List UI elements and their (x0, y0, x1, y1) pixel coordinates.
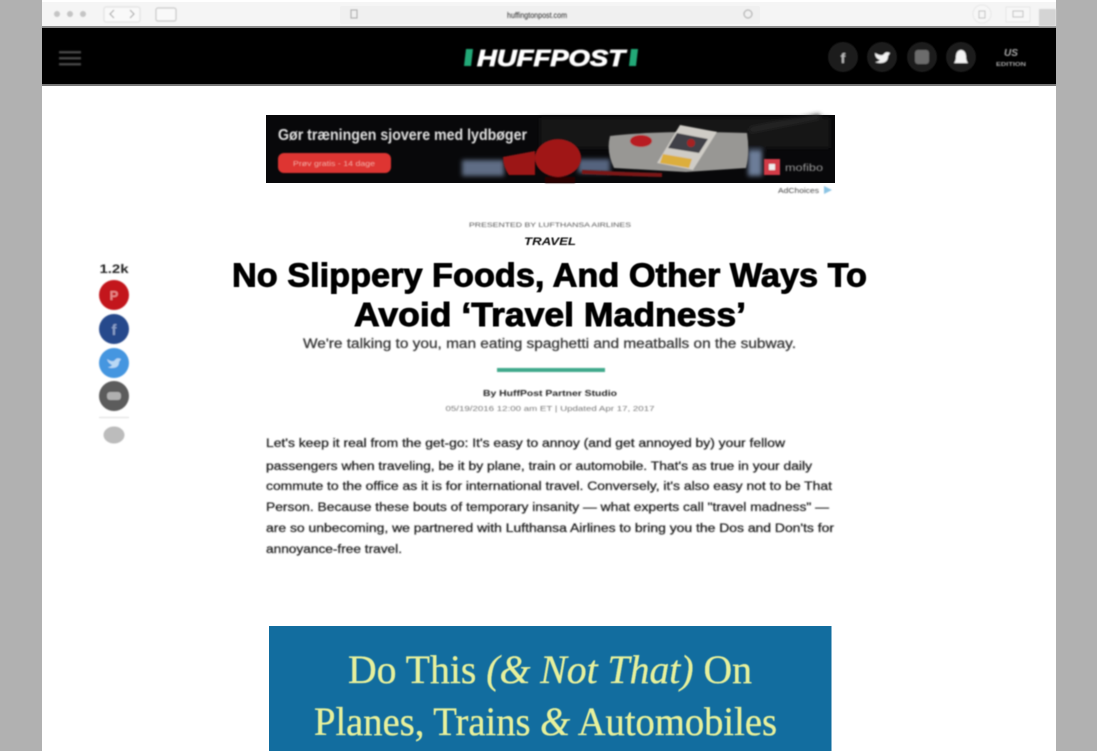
intro paragraph: Person. Because these bouts of temporary insanity — what experts call "travel madness" — (266, 502, 830, 514)
panel title: Planes, Trains & Automobiles (314, 699, 777, 744)
panel title: Do This (& Not That) On (348, 647, 752, 692)
site header bar (42, 28, 1056, 86)
ad logo: mofibo (785, 163, 824, 174)
edition selector: US (1004, 48, 1018, 59)
date line: 05/19/2016 12:00 am ET | Updated Apr 17, 2017 (446, 404, 654, 413)
left grey margin (0, 0, 42, 751)
window controls (54, 11, 86, 17)
ad logo (764, 159, 824, 175)
infographic preview panel (269, 626, 832, 751)
edition selector: EDITION (996, 62, 1026, 68)
browser toolbar (42, 2, 1056, 28)
intro paragraph: annoyance-free travel. (266, 544, 402, 556)
intro paragraph: commute to the office as it is for international travel. Conversely, it's also easy not to be That (266, 481, 833, 493)
share buttons (99, 280, 129, 444)
green divider (497, 368, 605, 372)
intro paragraph: Let's keep it real from the get-go: It's easy to annoy (and get annoyed by) your fellow (266, 438, 786, 450)
facebook button (99, 314, 129, 344)
advertisement banner (266, 115, 835, 183)
hamburger menu icon (59, 51, 81, 66)
intro paragraph: passengers when traveling, be it by plane, train or automobile. That's as true in your daily (266, 461, 812, 473)
facebook button: f (112, 322, 118, 339)
headline: Avoid ‘Travel Madness’ (354, 296, 746, 333)
ad headline: Gør træningen sjovere med lydbøger (278, 127, 527, 144)
ad image: phone (657, 125, 717, 170)
ad image: gym bag (609, 132, 748, 172)
social icons (828, 42, 976, 72)
share count: 1.2k (100, 262, 129, 276)
intro paragraph (266, 438, 834, 556)
ad image: red headphones (503, 139, 662, 183)
ad button: Prøv gratis - 14 dage (293, 159, 375, 168)
toolbar icons (351, 5, 1056, 26)
right grey margin (1056, 0, 1097, 751)
ad button (278, 153, 391, 173)
ad backdrop (462, 116, 830, 176)
section label: TRAVEL (524, 236, 576, 248)
adchoices label (778, 186, 832, 195)
huffpost logo: HUFFPOST (477, 45, 627, 71)
edition selector (996, 48, 1026, 68)
address bar (340, 6, 760, 24)
pinterest button: P (110, 288, 119, 303)
headline (232, 256, 867, 333)
intro paragraph: are so unbecoming, we partnered with Lufthansa Airlines to bring you the Dos and Don'ts for (266, 523, 834, 535)
social icons: f (841, 50, 846, 66)
url: huffingtonpost.com (507, 11, 567, 20)
twitter button (99, 348, 129, 378)
pinterest button (99, 280, 129, 310)
subheadline: We're talking to you, man eating spaghetti and meatballs on the subway. (303, 336, 796, 351)
byline: By HuffPost Partner Studio (483, 388, 617, 398)
navigation buttons (104, 7, 176, 22)
headline: No Slippery Foods, And Other Ways To (232, 256, 867, 294)
adchoices label: AdChoices (778, 188, 820, 195)
sponsor line: PRESENTED BY LUFTHANSA AIRLINES (469, 222, 632, 229)
email button (99, 381, 129, 411)
separator and comments icon (99, 417, 129, 444)
panel title (314, 647, 777, 744)
